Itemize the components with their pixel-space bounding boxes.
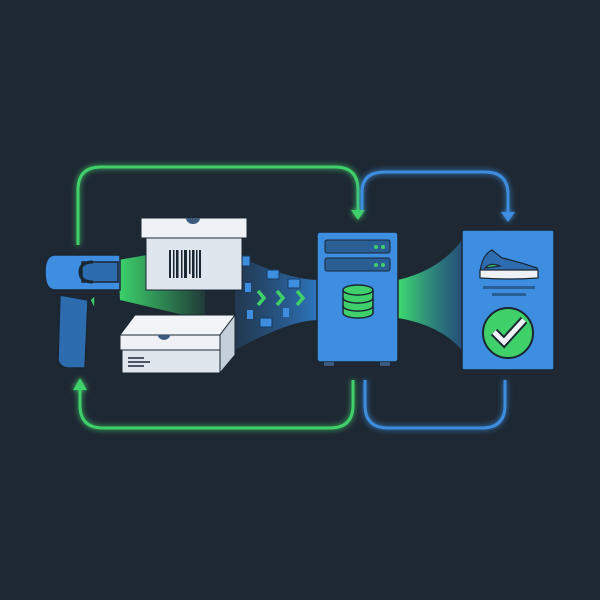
data stream bbox=[235, 255, 318, 350]
scanner beam bbox=[118, 245, 205, 320]
arrow: green loop bottom bbox=[73, 378, 353, 428]
box: bottom with label bbox=[120, 315, 235, 373]
panel: verified product document bbox=[462, 230, 554, 370]
box: top with barcode bbox=[141, 218, 247, 290]
arrow: green loop top bbox=[78, 167, 365, 245]
arrow: blue loop top bbox=[362, 172, 515, 222]
green cone to document bbox=[398, 240, 462, 350]
icon: barcode scanner bbox=[45, 255, 120, 368]
icon: sneaker bbox=[480, 250, 538, 279]
arrow: blue loop bottom bbox=[365, 380, 505, 428]
icon: check bbox=[483, 308, 533, 358]
icon: server bbox=[317, 232, 398, 366]
